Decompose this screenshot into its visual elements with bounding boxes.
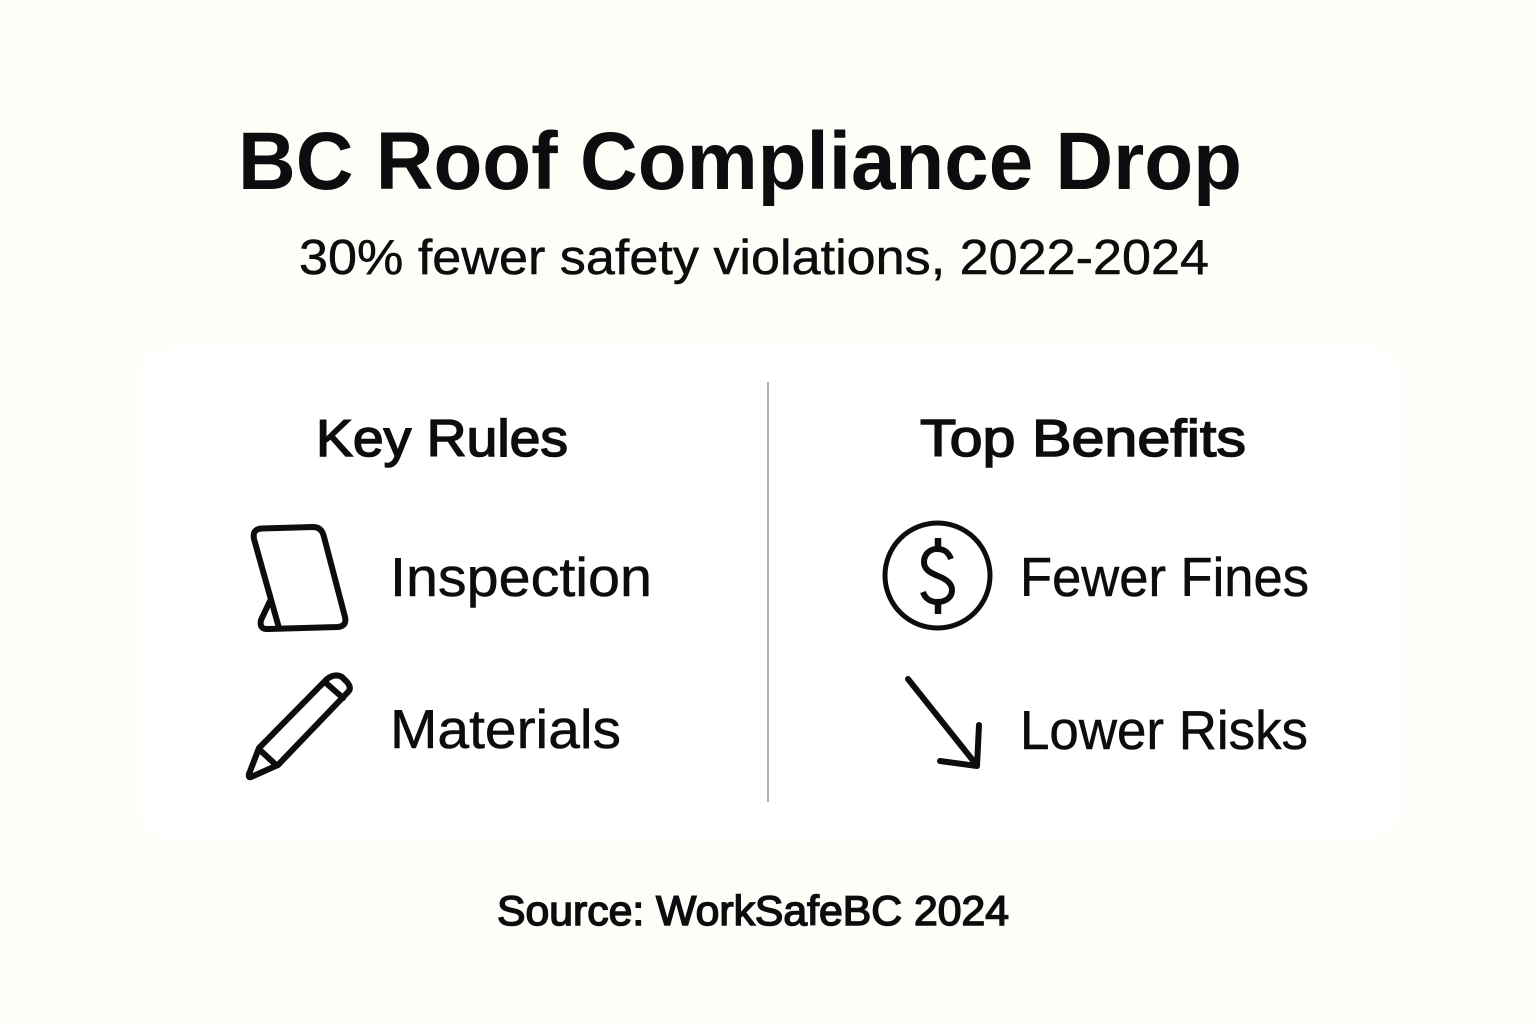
label: fewer fines: Fewer Fines: [1020, 546, 1309, 608]
icon: dollar coin: [885, 523, 990, 628]
heading: top benefits: Top Benefits: [920, 410, 1246, 468]
source: Source: WorkSafeBC 2024: [497, 887, 1009, 934]
panel: rules and benefits: [135, 347, 1403, 838]
heading: key rules: Key Rules: [316, 410, 568, 468]
label: materials: Materials: [390, 698, 621, 760]
label: lower risks: Lower Risks: [1020, 699, 1308, 761]
subtitle: 30% fewer safety violations, 2022-2024: [299, 231, 1209, 285]
icon: tablet: [254, 527, 345, 629]
panel background: [135, 347, 1403, 838]
icon: down arrow: [908, 679, 979, 766]
icon: pencil: [249, 675, 350, 777]
title: BC Roof Compliance Drop: [238, 116, 1242, 207]
label: inspection: Inspection: [390, 546, 652, 608]
